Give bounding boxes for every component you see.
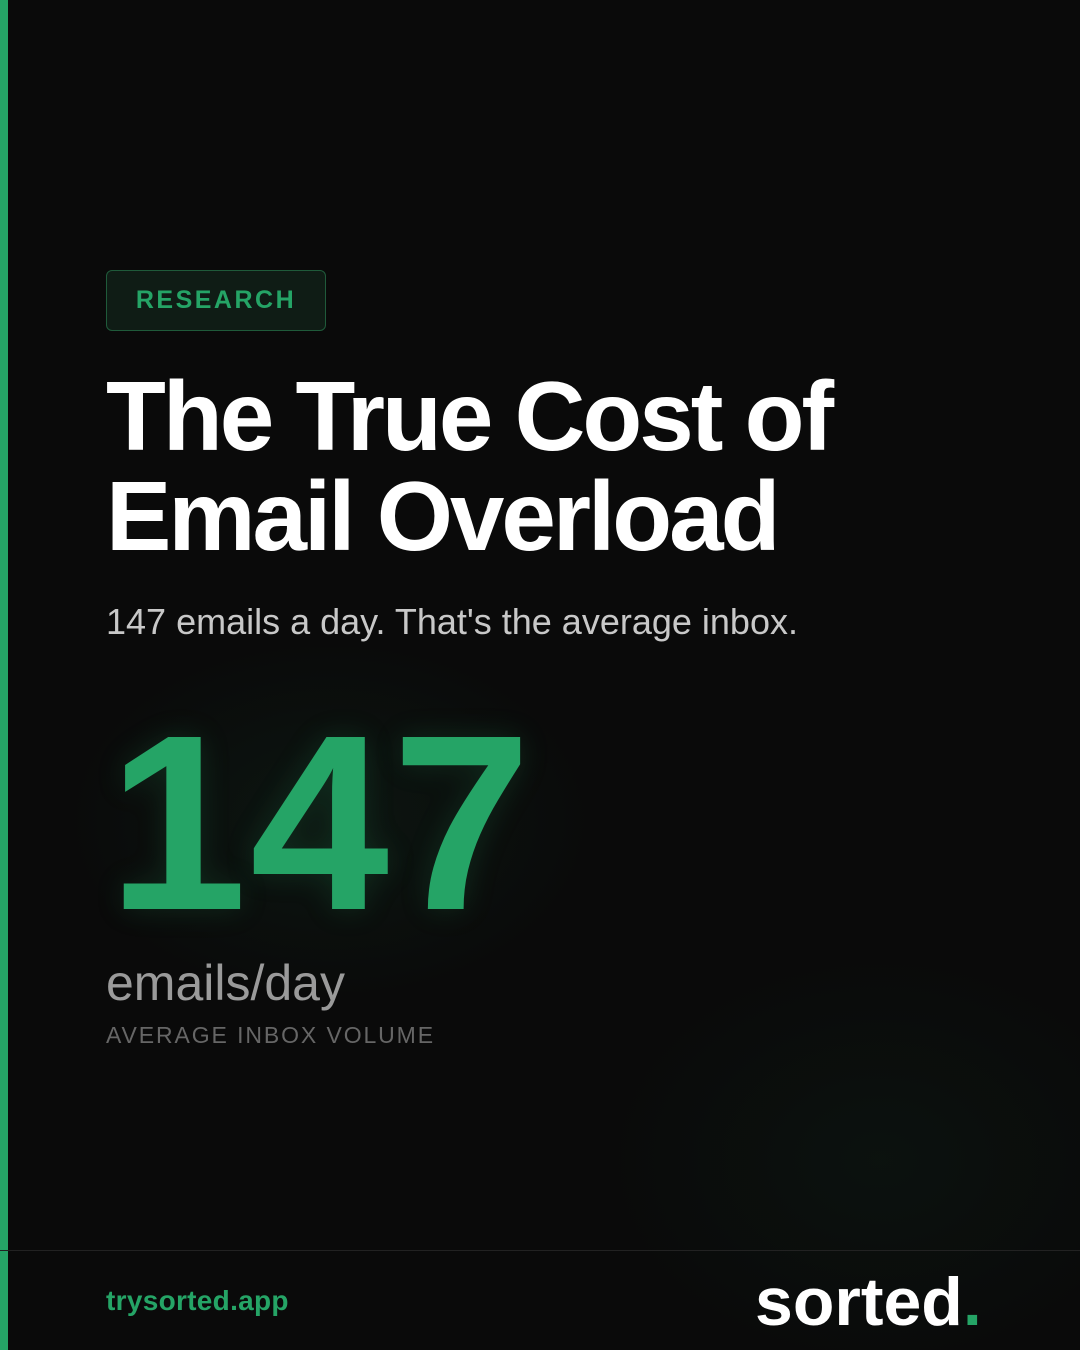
badge: research: RESEARCH <box>136 286 296 314</box>
badge: research <box>106 270 326 331</box>
big stat number: 147 <box>108 683 534 962</box>
title <box>106 361 834 571</box>
title: The True Cost of <box>106 361 831 471</box>
left accent bar <box>0 0 8 1350</box>
subtitle: 147 emails a day. That's the average inbox. <box>106 601 798 642</box>
title: Email Overload <box>106 461 778 571</box>
logo: sorted.: sorted. <box>755 1264 982 1340</box>
stat unit: emails/day <box>106 955 345 1011</box>
stat label: AVERAGE INBOX VOLUME <box>106 1022 435 1048</box>
footer url: trysorted.app <box>106 1285 289 1316</box>
